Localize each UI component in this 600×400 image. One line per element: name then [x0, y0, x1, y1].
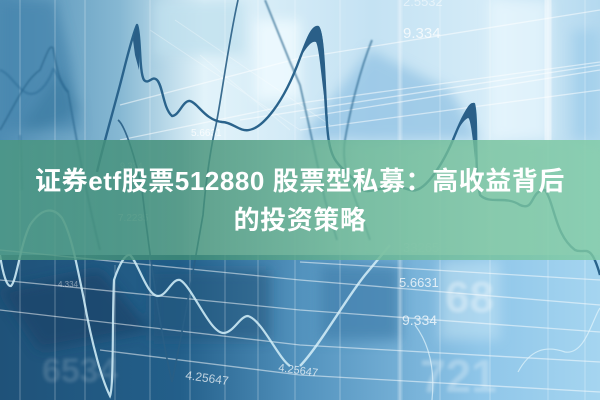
background chart numbers [58, 0, 443, 388]
blurred large digits [42, 273, 497, 400]
background chart numbers: 9.334 [403, 25, 441, 42]
background chart numbers: 5.6631 [399, 275, 439, 290]
background chart numbers: 4.25647 [185, 368, 230, 388]
chart line: left faded curve [0, 69, 68, 190]
blurred large digits: 68 [445, 273, 494, 322]
chart peaks: thick dark tips [133, 24, 476, 160]
chart line: thin light curve [415, 308, 600, 400]
chart line: white rising line [300, 245, 390, 366]
background chart numbers: 7.2235 [118, 213, 149, 224]
background chart numbers: 4.25647 [278, 362, 319, 380]
background chart numbers: 4.334 [58, 280, 79, 289]
background chart numbers: 9.334 [402, 312, 437, 328]
chart line: third dark curve [0, 0, 372, 250]
background chart numbers: 5.6631 [191, 128, 222, 139]
background chart numbers: 9.334 [120, 161, 143, 171]
blurred large digits: 6534 [42, 352, 118, 390]
chart line: second dark curve [118, 0, 238, 382]
chart line: dark main curve [97, 25, 600, 275]
chart line: white curve [0, 211, 290, 396]
title: 证券etf股票512880 股票型私募：高收益背后的投资策略 [35, 166, 565, 234]
background chart numbers: 33265 [403, 240, 439, 255]
